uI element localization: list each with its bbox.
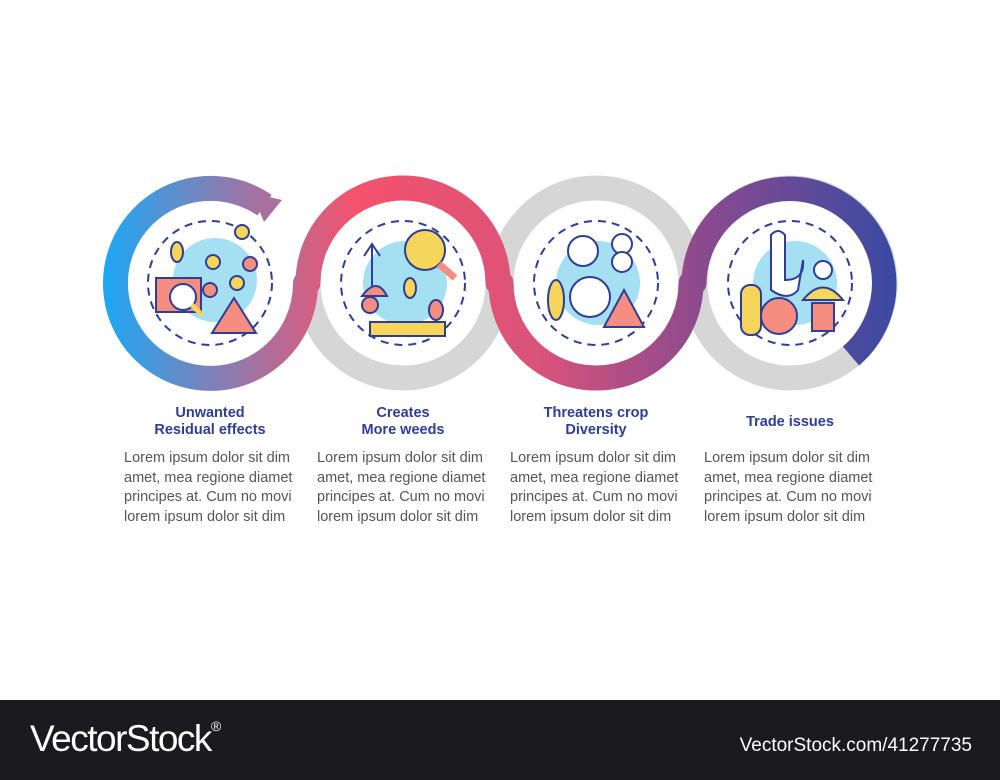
- footer id: VectorStock.com/41277735: [740, 735, 972, 756]
- title 1: [154, 405, 266, 438]
- column 4: [704, 414, 872, 525]
- title 2: More weeds: [362, 422, 444, 438]
- column 1: [124, 405, 292, 525]
- colored snake path: [116, 188, 884, 378]
- title 1: Unwanted: [175, 405, 245, 421]
- title 4: Trade issues: [746, 414, 834, 430]
- body 3: Lorem ipsum dolor sit dim amet, mea regione diamet principes at. Cum no movi lorem ipsum dolor sit dim: [510, 450, 678, 525]
- title 3: [544, 405, 648, 438]
- icon 3: [534, 221, 658, 345]
- body 4: Lorem ipsum dolor sit dim amet, mea regione diamet principes at. Cum no movi lorem ipsum dolor sit dim: [704, 450, 872, 525]
- body 1: Lorem ipsum dolor sit dim amet, mea regione diamet principes at. Cum no movi lorem ipsum dolor sit dim: [124, 450, 292, 525]
- title 3: Threatens crop: [544, 405, 648, 421]
- ring chain graphic: [103, 176, 898, 391]
- arrowhead: [252, 193, 282, 222]
- icon 2: [341, 221, 465, 345]
- footer bar: [0, 700, 1000, 780]
- icon 4: [728, 221, 852, 345]
- column 2: [317, 405, 486, 525]
- body 2: Lorem ipsum dolor sit dim amet, mea regione diamet principes at. Cum no movi lorem ipsum dolor sit dim: [317, 450, 485, 525]
- title 2: Creates: [376, 405, 430, 421]
- title 1: Residual effects: [154, 422, 266, 438]
- icon 1: [148, 221, 272, 345]
- title 3: Diversity: [565, 422, 627, 438]
- footer logo: VectorStock®: [30, 718, 220, 759]
- column 3: [510, 405, 678, 525]
- title 2: [362, 405, 444, 438]
